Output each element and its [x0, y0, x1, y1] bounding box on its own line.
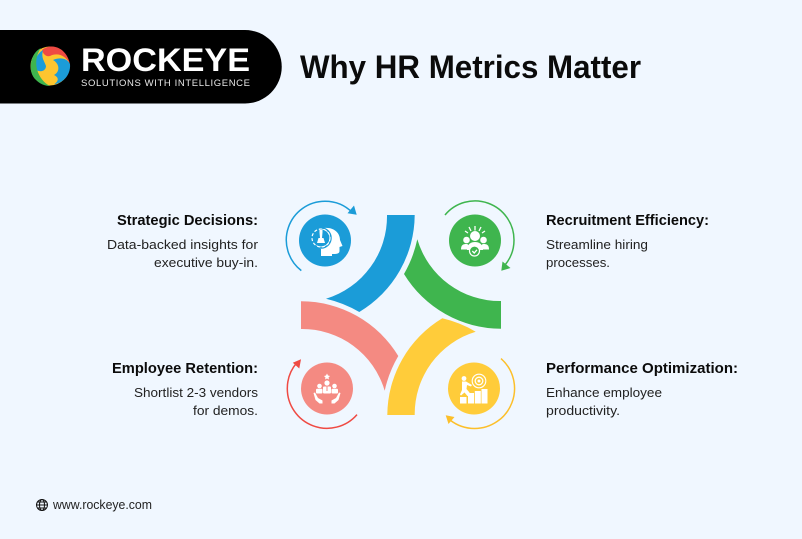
- text block: [546, 385, 662, 418]
- icon: globe: [36, 500, 48, 510]
- panel: performance optimization: [446, 358, 738, 429]
- text block: [546, 237, 648, 270]
- text block: executive buy-in.: [154, 255, 258, 270]
- icon: people in hands: [301, 362, 353, 414]
- arrow: blue arc: [286, 201, 357, 271]
- segment: green: [404, 239, 501, 329]
- logo tagline: SOLUTIONS WITH INTELLIGENCE: [81, 78, 250, 89]
- heading: Strategic Decisions:: [117, 212, 258, 229]
- text block: [107, 237, 259, 270]
- text block: Shortlist 2-3 vendors: [134, 385, 259, 400]
- logo banner: [0, 30, 282, 104]
- text block: Streamline hiring: [546, 237, 648, 252]
- segment: blue: [326, 215, 415, 312]
- arrow: yellow arc: [446, 358, 515, 429]
- text block: Data-backed insights for: [107, 237, 259, 252]
- logo wordmark: ROCKEYE: [81, 42, 250, 78]
- central ring: four curved segments: [301, 215, 501, 415]
- footer: website: [36, 497, 152, 512]
- panel: recruitment efficiency: [445, 201, 709, 271]
- panel: employee retention: [112, 359, 357, 428]
- segment: red: [301, 301, 398, 391]
- heading: Employee Retention:: [112, 360, 258, 377]
- heading: Recruitment Efficiency:: [546, 212, 709, 229]
- title: Why HR Metrics Matter: [300, 49, 641, 85]
- heading: Performance Optimization:: [546, 360, 738, 377]
- text block: processes.: [546, 255, 610, 270]
- text block: [134, 385, 259, 418]
- segment: yellow: [387, 318, 476, 415]
- text block: for demos.: [193, 403, 258, 418]
- icon: team with check: [449, 214, 501, 266]
- text block: Enhance employee: [546, 385, 662, 400]
- arrow: green arc: [445, 201, 514, 271]
- panel: strategic decisions: [107, 201, 357, 271]
- text block: productivity.: [546, 403, 620, 418]
- arrow: red arc: [287, 359, 357, 428]
- icon: swirl logo: [30, 46, 70, 86]
- icon: head with chess piece: [299, 214, 351, 266]
- website url: www.rockeye.com: [52, 497, 152, 512]
- icon: climbing steps to target: [448, 362, 500, 414]
